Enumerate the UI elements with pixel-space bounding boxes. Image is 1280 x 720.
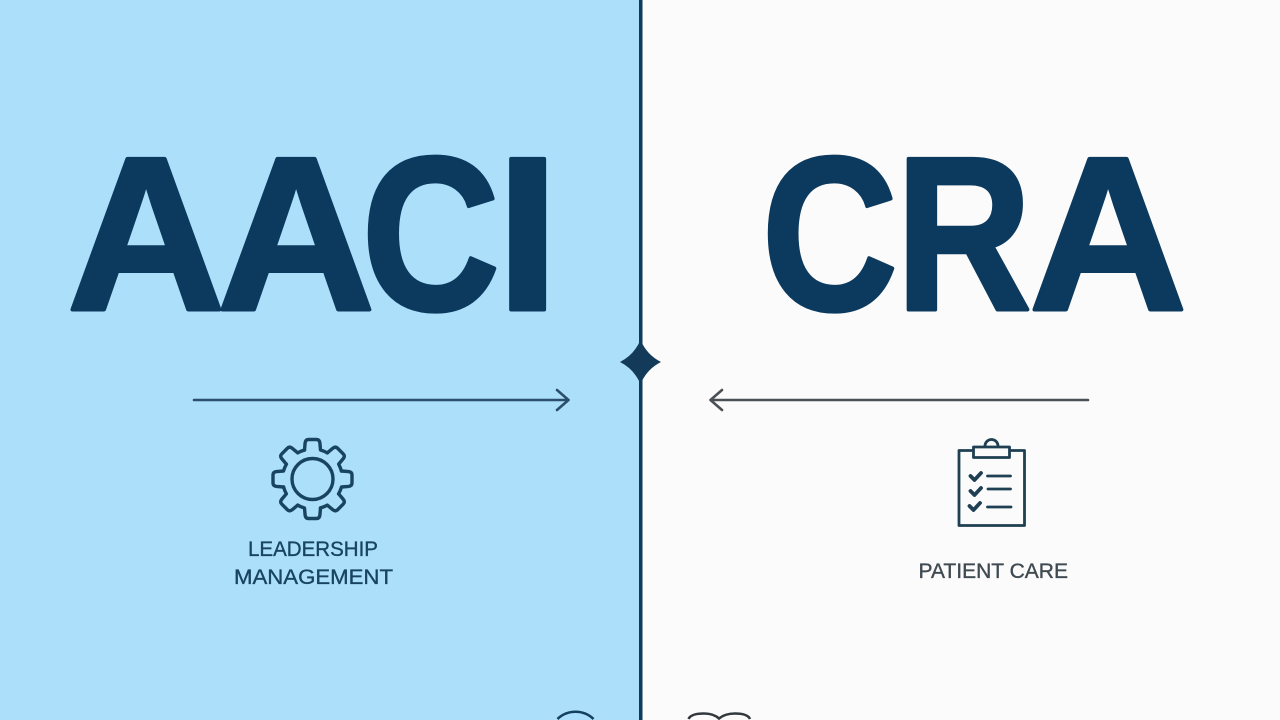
arrow: pointing left (710, 390, 1088, 410)
title: CRA: C (762, 112, 898, 357)
panel: AACI background (0, 0, 640, 720)
title: CRA (762, 112, 1187, 357)
title: CRA: A (1029, 112, 1187, 356)
icon: gear (273, 440, 352, 518)
title: CRA: R (896, 112, 1032, 357)
icon: clipboard checklist (959, 440, 1024, 526)
panel: CRA background (640, 0, 1280, 720)
label: leadership management (234, 538, 393, 589)
label: patient care: PATIENT CARE (918, 560, 1068, 583)
label: leadership management: MANAGEMENT (234, 566, 393, 589)
title: AACI: A (67, 112, 225, 356)
title: AACI: C (362, 111, 500, 356)
arrow: pointing right (194, 390, 568, 410)
title: AACI (67, 111, 559, 357)
centre divider line (639, 0, 642, 720)
icon: cropped heart at bottom edge (688, 714, 750, 719)
icon: centre diamond (620, 340, 661, 384)
icon: cropped circle at bottom edge (558, 712, 594, 719)
title: AACI: I (496, 112, 559, 357)
title: AACI: A (217, 112, 375, 356)
label: leadership management: LEADERSHIP (248, 538, 378, 561)
